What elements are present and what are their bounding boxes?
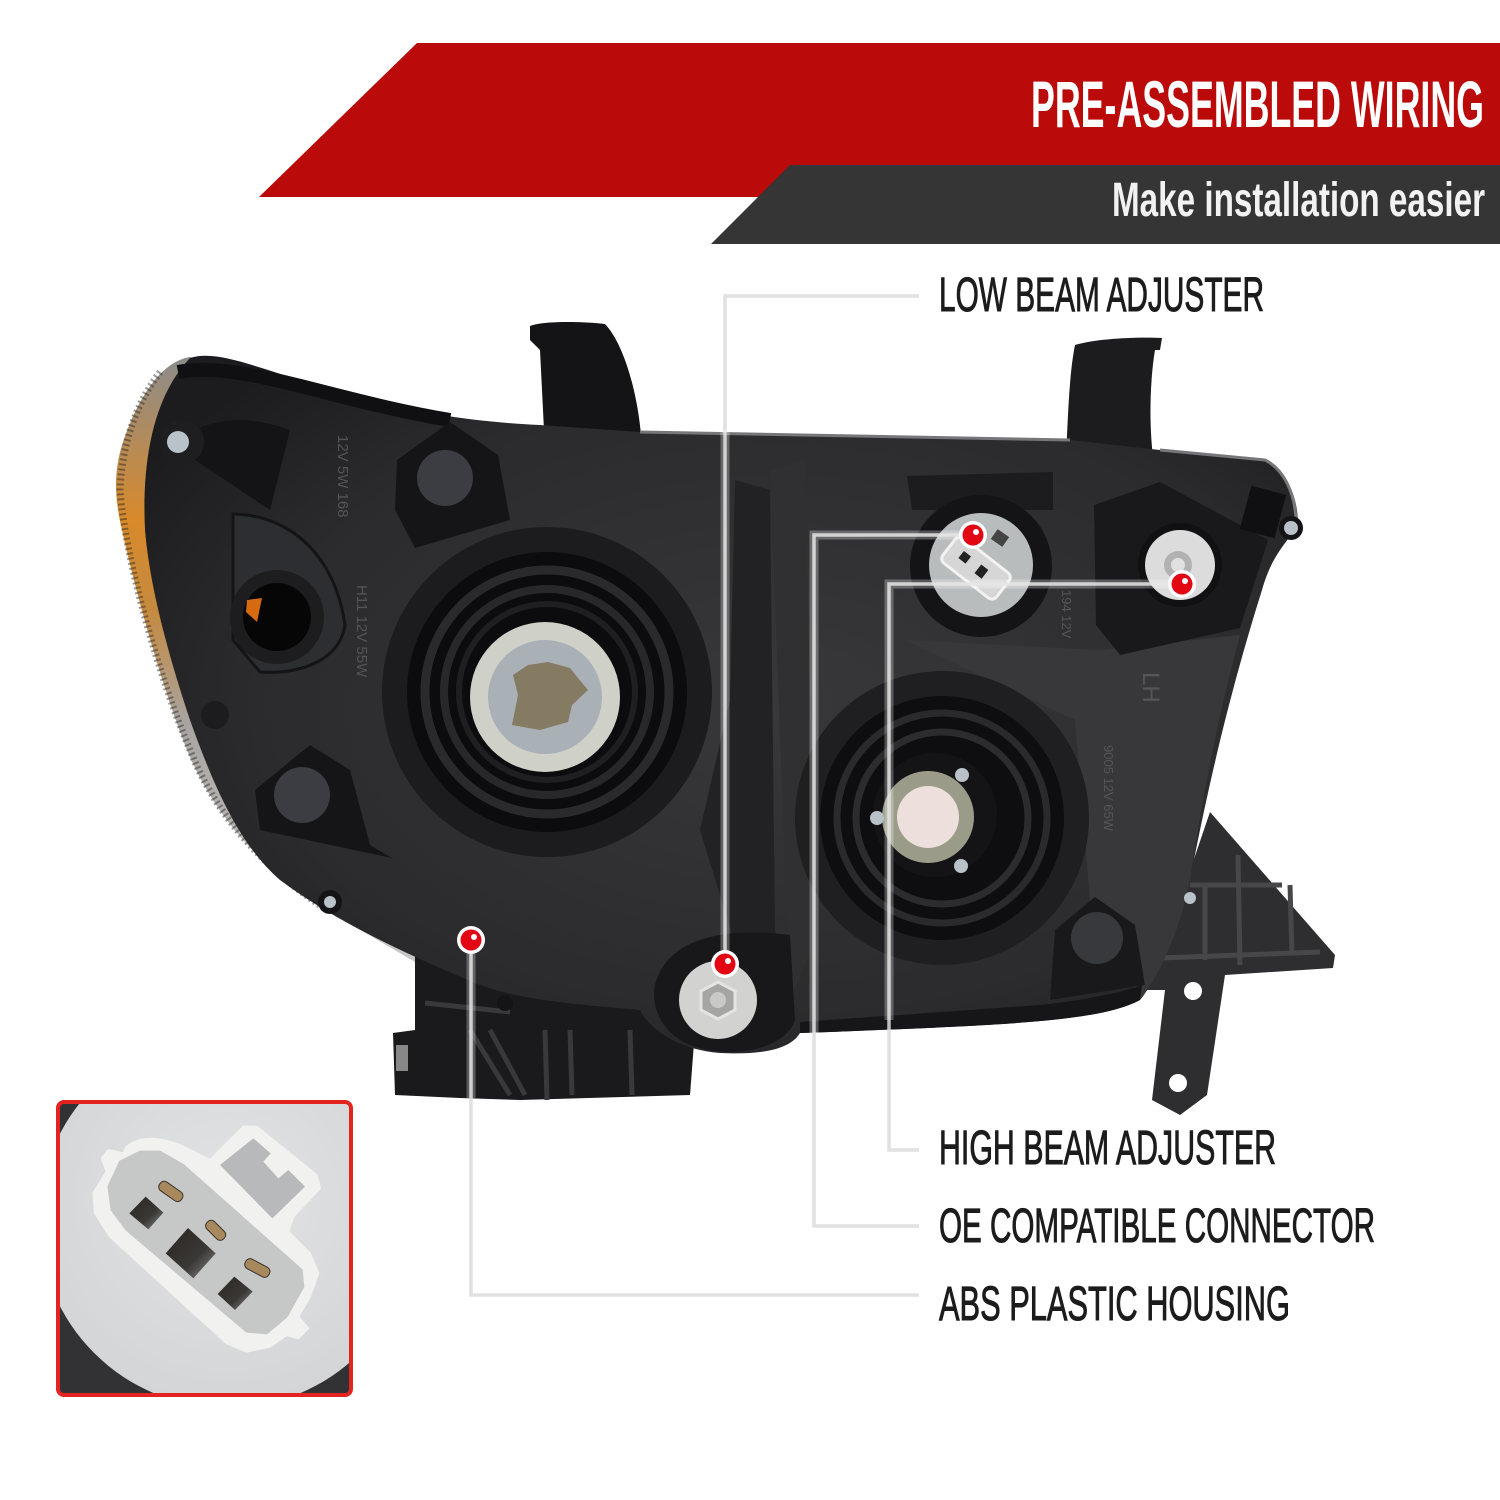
connector socket (910, 495, 1052, 637)
low beam adjuster bolt (654, 932, 795, 1052)
marker dot: connector (959, 521, 987, 549)
label: ABS plastic housing: ABS PLASTIC HOUSING (939, 1278, 1290, 1331)
label: high beam adjuster: HIGH BEAM ADJUSTER (939, 1122, 1276, 1175)
top left rim (178, 370, 450, 420)
callout leader: high beam adjuster (889, 584, 1182, 1150)
right panel (905, 635, 1240, 1000)
inset: connector close-up (56, 1100, 353, 1397)
red banner (259, 43, 1500, 197)
headlight housing photo: H11 12V 55W (353, 585, 370, 678)
label: low beam adjuster: LOW BEAM ADJUSTER (939, 269, 1264, 322)
headlight housing photo: 194 12V (1059, 590, 1074, 639)
bottom rim (800, 985, 1142, 1033)
headlight housing photo: 9005 12V 65W (1101, 745, 1116, 832)
vertical centre rib (700, 480, 790, 1020)
screws (160, 420, 1303, 1011)
callout leader: low beam adjuster (725, 296, 919, 965)
headlight housing photo: LH (1137, 672, 1164, 703)
callout leader: ABS plastic housing (471, 940, 919, 1295)
top tabs (530, 322, 642, 450)
marker dot: high beam adjuster (1168, 570, 1196, 598)
mounting bracket right (1140, 812, 1335, 1115)
lower connector bracket (393, 940, 695, 1100)
locking window (220, 1138, 305, 1218)
embossed text: 12V 5W 168 (334, 435, 351, 518)
lens ribbing (120, 372, 330, 912)
amber side lens (116, 357, 440, 965)
side marker socket (233, 514, 345, 672)
leader glow over the housing (471, 430, 1182, 1098)
parking adjuster (1138, 486, 1286, 607)
marker dot: low beam adjuster (711, 950, 739, 978)
connector cavity (108, 1152, 303, 1333)
top rim highlight (640, 432, 1296, 520)
low beam boot (382, 527, 712, 857)
headlight housing photo (116, 322, 1335, 1115)
main housing body (144, 356, 1298, 1053)
dark sub-banner (711, 165, 1500, 244)
connector shell (93, 1127, 320, 1352)
high beam boot (795, 671, 1089, 965)
marker dot: housing (457, 926, 485, 954)
small vents and ribs (175, 420, 290, 510)
callout leader: OE compatible connector (814, 535, 973, 1226)
